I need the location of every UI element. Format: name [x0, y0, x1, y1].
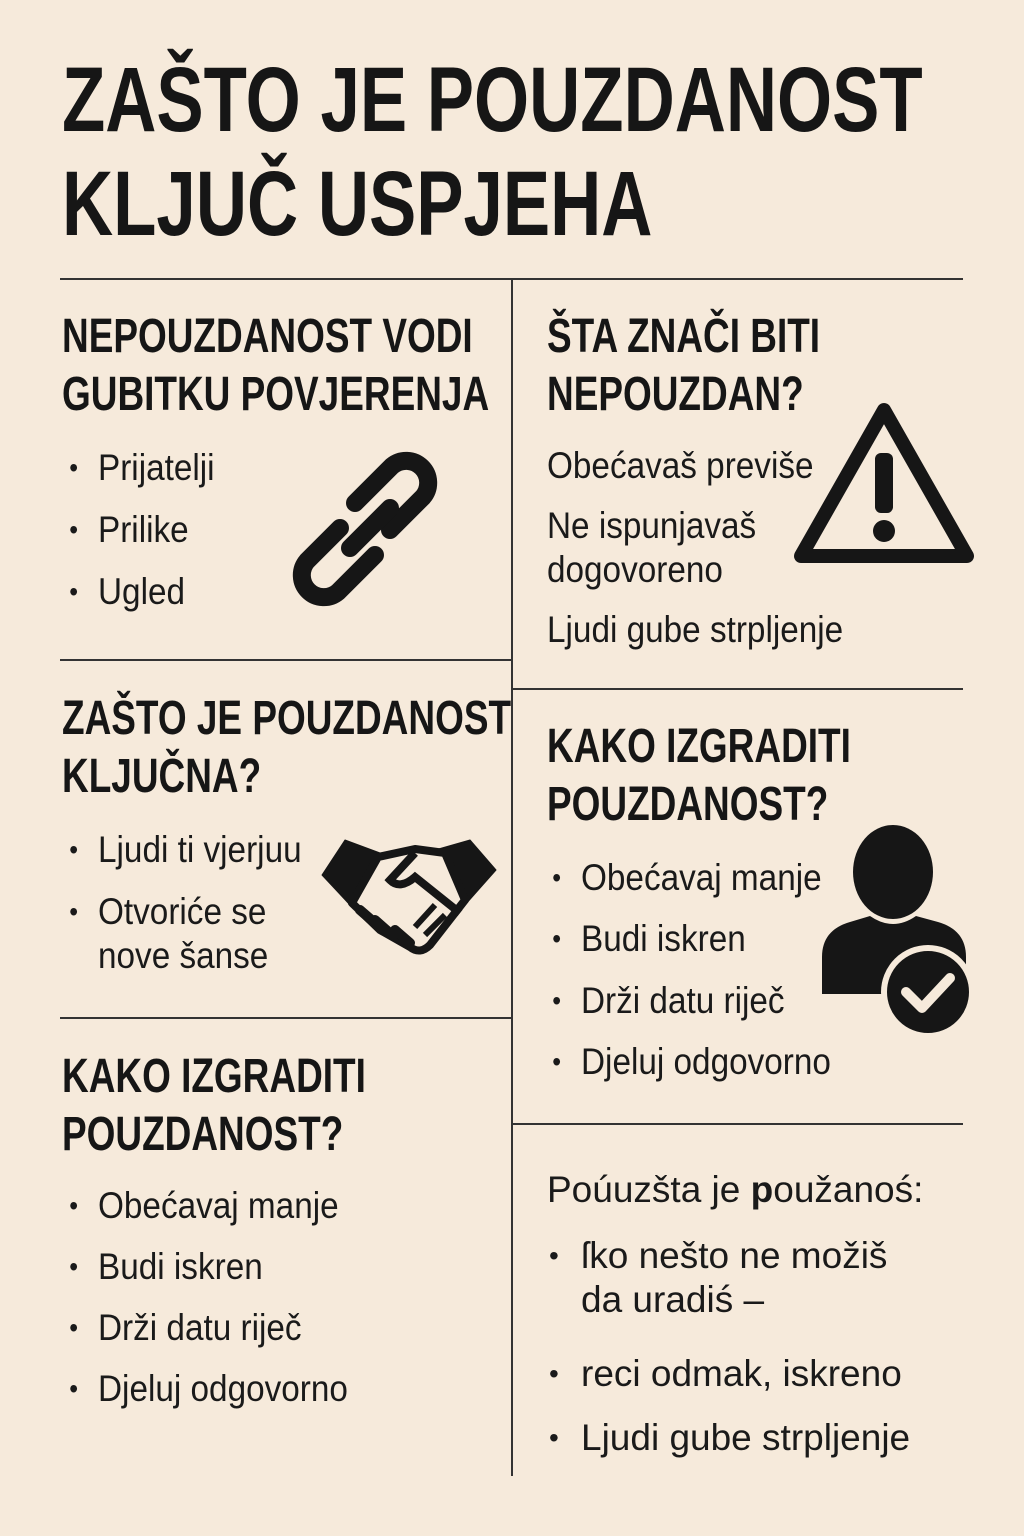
list: Drži datu riječ [581, 980, 785, 1021]
list: Budi iskren [98, 1246, 263, 1287]
text block: Ljudi gube strpljenje [547, 609, 843, 650]
list: reci odmak, iskreno [581, 1353, 902, 1394]
heading: NEPOUZDANOST VODI [62, 310, 473, 363]
panel: reliability advice [547, 1169, 923, 1458]
list: Ugled [98, 571, 185, 612]
title [62, 48, 923, 255]
heading [62, 690, 511, 803]
text block: Ne ispunjavaš [547, 505, 756, 546]
list: Ljudi gube strpljenje [581, 1417, 910, 1458]
heading: POUZDANOST? [62, 1108, 343, 1161]
list [70, 829, 302, 976]
heading: ZAŠTO JE POUZDANOST [62, 692, 511, 745]
panel: unreliability leads to loss of trust [62, 310, 489, 612]
list: Drži datu riječ [98, 1307, 302, 1348]
heading [547, 720, 851, 831]
heading: NEPOUZDAN? [547, 368, 804, 421]
icon: warning triangle [794, 403, 974, 563]
heading [62, 310, 489, 421]
list [553, 857, 831, 1082]
text block: dogovoreno [547, 549, 723, 590]
icon: broken chain [292, 452, 438, 606]
list: Otvoriće se [98, 891, 266, 932]
text block: Obećavaš previše [547, 445, 814, 486]
list: nove šanse [98, 935, 268, 976]
panel: why reliability is key [62, 690, 511, 976]
heading: KAKO IZGRADITI [547, 720, 851, 773]
list: Obećavaj manje [581, 857, 822, 898]
text block [547, 445, 843, 650]
list: Djeluj odgovorno [98, 1368, 348, 1409]
list: Ljudi ti vjerjuu [98, 829, 302, 870]
icon: person with check [822, 825, 969, 1033]
heading: KLJUČNA? [62, 750, 261, 803]
heading: ŠTA ZNAČI BITI [547, 310, 820, 363]
title: KLJUČ USPJEHA [62, 153, 652, 255]
list: ſko nešto ne možiš [581, 1235, 887, 1276]
list: Prilike [98, 509, 189, 550]
panel: how to build reliability (left) [62, 1050, 366, 1409]
title: ZAŠTO JE POUZDANOST [62, 49, 923, 151]
icon: handshake [322, 840, 496, 954]
list: Prijatelji [98, 447, 215, 488]
heading text: Poúuzšta je použanoś: [547, 1169, 923, 1210]
list: Obećavaj manje [98, 1185, 339, 1226]
panel: what does it mean to be unreliable [547, 308, 974, 650]
panel: how to build reliability (right) [547, 720, 969, 1082]
heading [62, 1050, 366, 1161]
heading [547, 308, 820, 421]
list [70, 447, 215, 612]
list: da uradiś – [581, 1279, 764, 1320]
list: Djeluj odgovorno [581, 1041, 831, 1082]
heading: KAKO IZGRADITI [62, 1050, 366, 1103]
list: Budi iskren [581, 918, 746, 959]
list [550, 1235, 910, 1458]
list [70, 1185, 348, 1409]
heading: GUBITKU POVJERENJA [62, 368, 489, 421]
heading: POUZDANOST? [547, 778, 828, 831]
